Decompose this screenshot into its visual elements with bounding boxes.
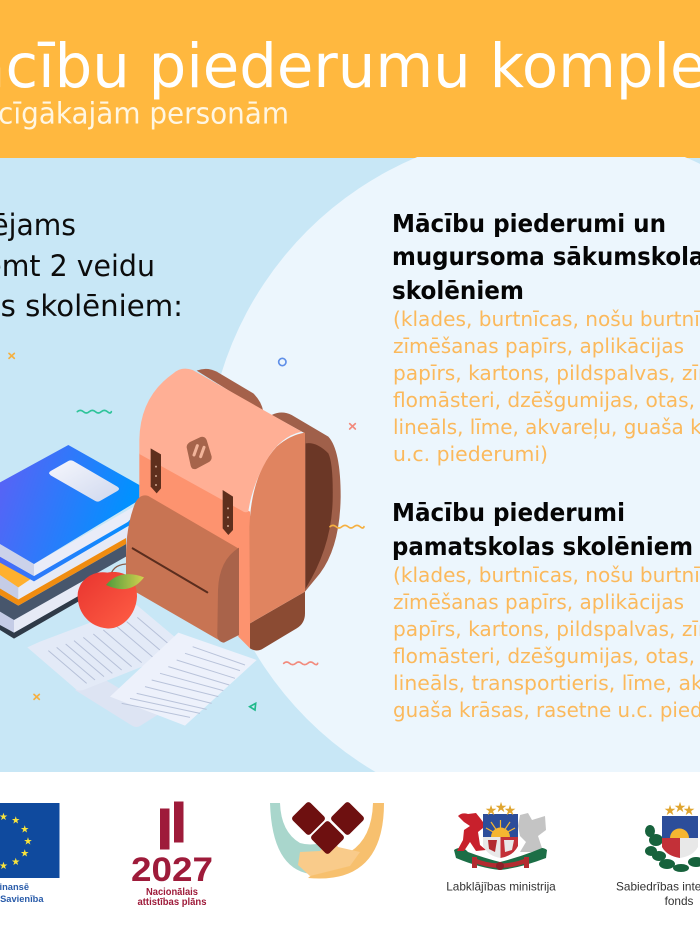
- icon: apple: [78, 564, 144, 628]
- list of supplies: primary school: u.c. piederumi): [393, 442, 548, 466]
- logo: EU flag: ★: [11, 857, 20, 868]
- logo: Social Integration Fund coat of arms: ★: [683, 803, 695, 819]
- right text: first package: [392, 209, 700, 466]
- logo: Social Integration Fund coat of arms: ★: [674, 800, 686, 816]
- logo: EU flag: [0, 803, 60, 904]
- stars: ★: [495, 800, 507, 816]
- stars: [485, 800, 516, 819]
- illustration: school supplies: [0, 353, 364, 727]
- icon: paper sheets: [27, 605, 257, 727]
- heading: primary school: skolēniem: [392, 276, 524, 305]
- wreath and ribbon: [454, 848, 547, 870]
- logo: EU flag: ★: [11, 816, 20, 826]
- intro text block: [0, 208, 183, 323]
- panel: pale circle behind text: [218, 157, 700, 772]
- oak wreath: [645, 825, 700, 872]
- heading: primary school: [392, 209, 700, 305]
- decorative marks: [9, 353, 364, 710]
- list of supplies: basic school: zīmēšanas papīrs, aplikācijas: [393, 590, 684, 614]
- list of supplies: basic school: flomāsteri, dzēšgumijas, otas,: [393, 644, 695, 668]
- lion: [457, 813, 486, 851]
- logo: EU flag: ★: [20, 824, 29, 836]
- list of supplies: basic school: [393, 563, 700, 722]
- heading: basic school: [392, 498, 693, 561]
- logo: Ministry of Welfare coat of arms: [446, 800, 556, 894]
- logo: hands holding diamonds: [270, 801, 384, 879]
- griffin: [518, 813, 546, 852]
- right text: second package: [392, 498, 700, 722]
- header band: [0, 0, 700, 158]
- panel: light blue background: [0, 158, 700, 772]
- logo: Social Integration Fund coat of arms: [616, 800, 700, 908]
- logo: EU flag: ★: [24, 836, 33, 848]
- list of supplies: primary school: flomāsteri, dzēšgumijas, otas,: [393, 388, 695, 412]
- logo: Nacionālais attīstības plāns 2027: Nacionālais: [146, 887, 198, 898]
- label: fund: fonds: [665, 894, 694, 908]
- logo: EU flag: ★: [20, 848, 29, 860]
- logo: Nacionālais attīstības plāns 2027: attistības plāns: [138, 897, 207, 908]
- stars: ★: [485, 803, 497, 819]
- heading: basic school: Mācību piederumi: [392, 498, 625, 527]
- stars: ★: [504, 803, 516, 819]
- icon: backpack: [126, 369, 341, 650]
- logo: Nacionālais attīstības plāns 2027: 2027: [131, 851, 213, 889]
- icon: stack of books: [0, 445, 139, 639]
- label: fund: [616, 880, 700, 908]
- list of supplies: primary school: zīmēšanas papīrs, aplikācijas: [393, 334, 684, 358]
- label: ministry: Labklājības ministrija: [446, 880, 556, 894]
- shield: [483, 814, 518, 837]
- list of supplies: primary school: [393, 307, 700, 466]
- logo: Nacionālais attīstības plāns 2027: [131, 802, 213, 908]
- heading: primary school: Mācību piederumi un: [392, 209, 666, 238]
- logo: Social Integration Fund coat of arms: ★: [664, 803, 676, 819]
